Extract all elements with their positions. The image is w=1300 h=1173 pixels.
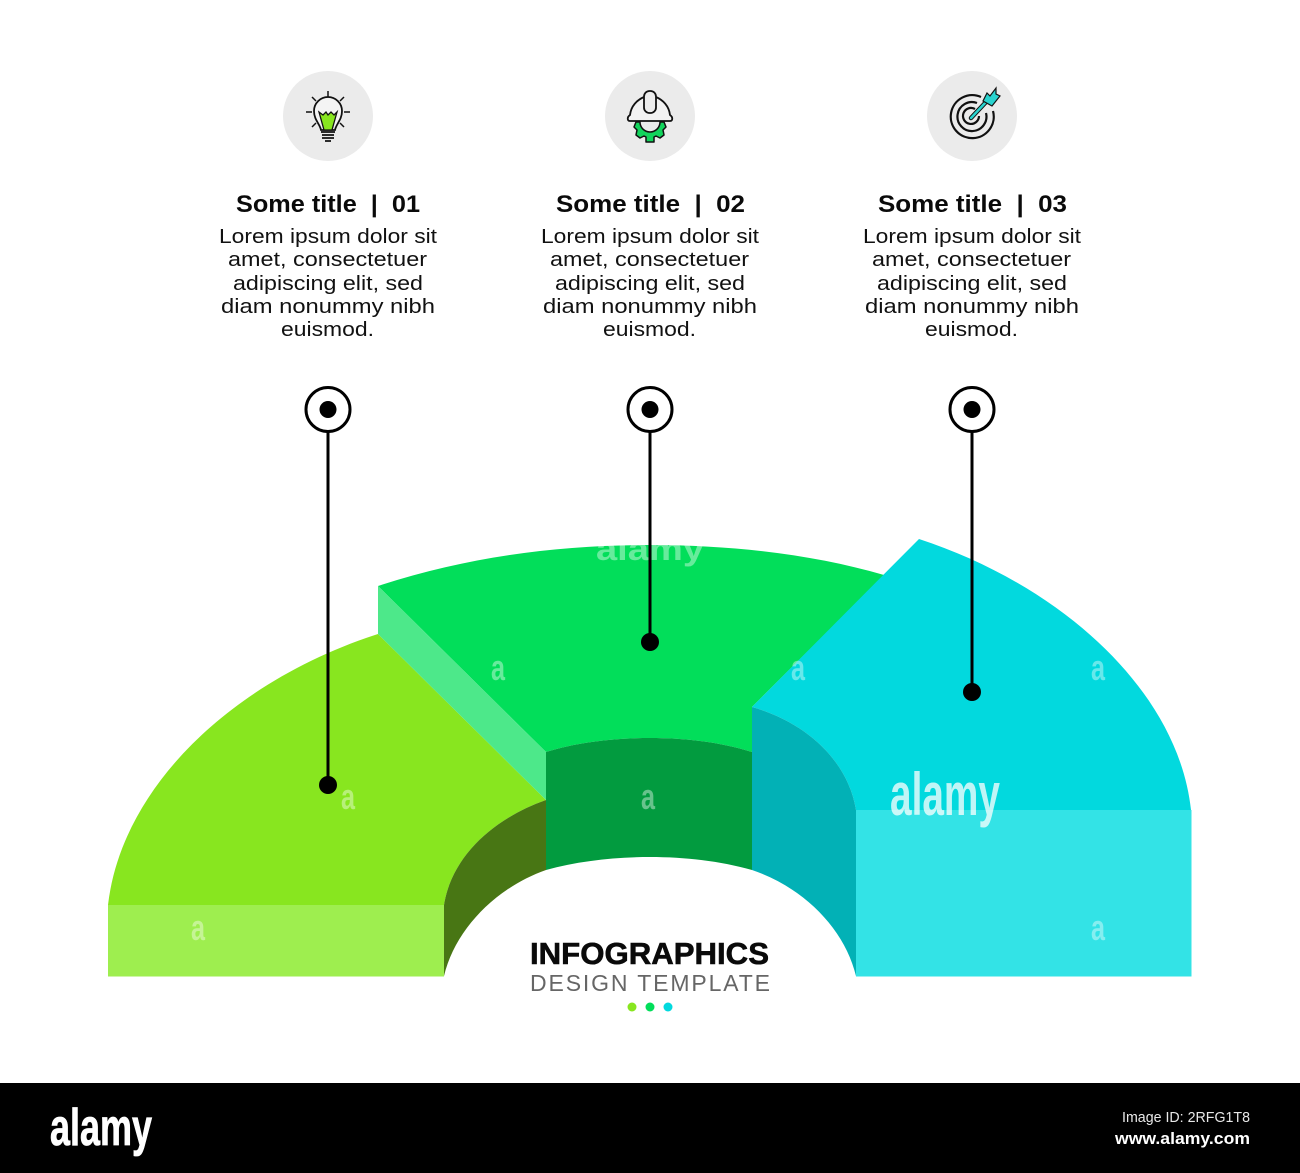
watermark letters: a	[191, 907, 206, 948]
text block: adipiscing elit, sed	[877, 273, 1067, 295]
watermark letters: a	[641, 776, 656, 817]
text block	[863, 226, 1081, 341]
icon: hard hat with gear	[605, 71, 695, 161]
legend dots	[628, 1002, 672, 1012]
center title: INFOGRAPHICS	[530, 936, 769, 971]
text block: amet, consectetuer	[228, 249, 427, 271]
text block: Lorem ipsum dolor sit	[863, 226, 1081, 248]
icon: light bulb	[283, 71, 373, 161]
watermark letters: alamy	[596, 531, 704, 567]
text block: Lorem ipsum dolor sit	[219, 226, 437, 248]
text block: diam nonummy nibh	[221, 296, 435, 318]
footer bar: alamy	[50, 1099, 152, 1157]
watermark letters: alamy	[890, 761, 1000, 828]
text block	[541, 226, 759, 341]
text block	[219, 226, 437, 341]
segment: left green	[108, 634, 546, 976]
watermark letters: a	[491, 647, 506, 688]
pointer line	[628, 388, 672, 651]
center title: DESIGN TEMPLATE	[530, 970, 770, 996]
text block: euismod.	[603, 319, 696, 341]
text block: euismod.	[281, 319, 374, 341]
text block: adipiscing elit, sed	[555, 273, 745, 295]
column 2	[541, 71, 759, 651]
watermark letters	[191, 531, 1106, 948]
footer bar: Image ID: 2RFG1T8	[1122, 1109, 1250, 1126]
title: Some title | 02	[556, 191, 745, 218]
watermark letters: a	[791, 647, 806, 688]
title: Some title | 01	[236, 191, 420, 218]
text block: euismod.	[925, 319, 1018, 341]
watermark letters: a	[1091, 907, 1106, 948]
column 3	[863, 71, 1081, 701]
text block: diam nonummy nibh	[865, 296, 1079, 318]
footer bar	[0, 1083, 1300, 1173]
watermark letters: a	[341, 776, 356, 817]
center title	[530, 936, 770, 1012]
text block: adipiscing elit, sed	[233, 273, 423, 295]
column 1	[219, 71, 437, 794]
pointer line	[950, 388, 994, 701]
icon: target with arrow	[927, 71, 1017, 161]
text block: Lorem ipsum dolor sit	[541, 226, 759, 248]
footer bar: www.alamy.com	[1114, 1129, 1250, 1148]
segment: middle green	[378, 545, 884, 870]
panel: central semicircle diagram	[108, 531, 1192, 976]
text block: amet, consectetuer	[550, 249, 749, 271]
segment: right cyan	[752, 539, 1192, 976]
watermark letters: a	[1091, 647, 1106, 688]
title: Some title | 03	[878, 191, 1067, 218]
text block: amet, consectetuer	[872, 249, 1071, 271]
text block: diam nonummy nibh	[543, 296, 757, 318]
pointer line	[306, 388, 350, 794]
